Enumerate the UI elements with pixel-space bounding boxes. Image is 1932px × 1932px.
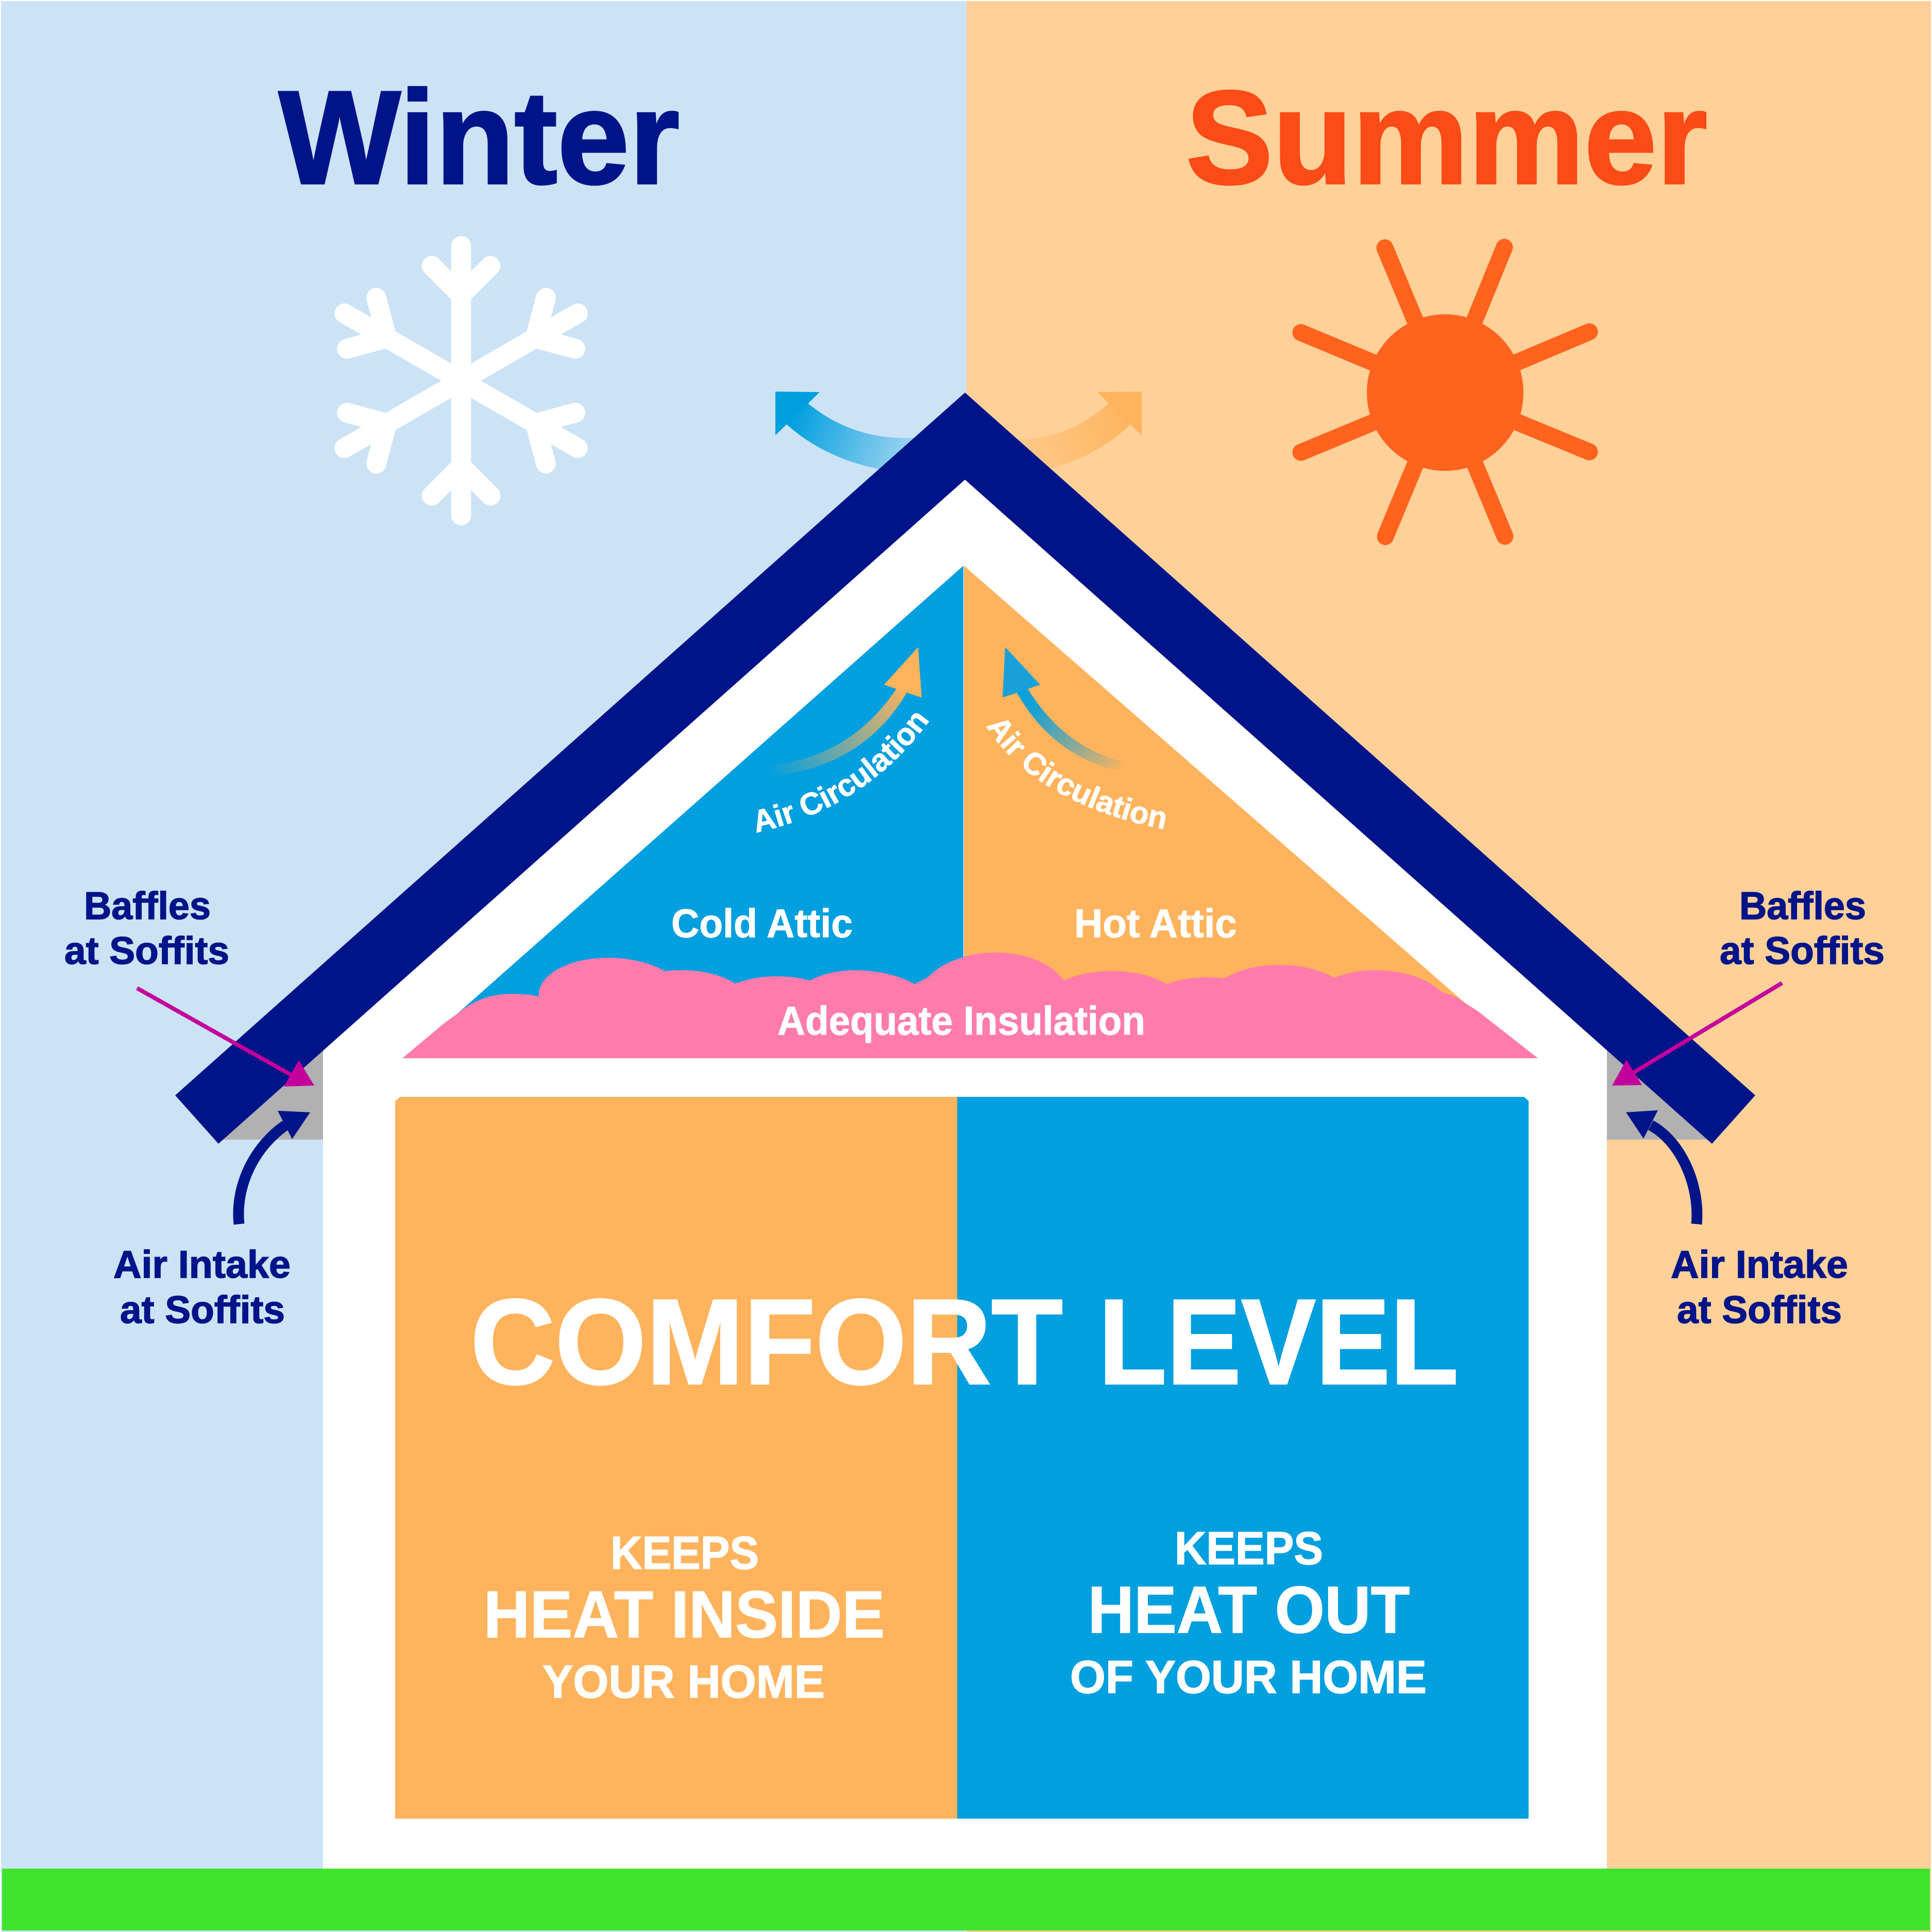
room: winter side bbox=[395, 1097, 957, 1819]
arrow: air intake left bbox=[239, 1111, 310, 1224]
label: Air Intake at Soffits right: Air Intake bbox=[1671, 1243, 1848, 1286]
text block: winter benefit: HEAT INSIDE bbox=[483, 1578, 885, 1652]
text block: summer benefit: HEAT OUT bbox=[1088, 1573, 1410, 1647]
icon: sun bbox=[1301, 247, 1589, 537]
label: Hot Attic: Hot Attic bbox=[1074, 901, 1237, 946]
label: Baffles at Soffits right: at Soffits bbox=[1720, 929, 1885, 972]
background: summer panel bbox=[967, 1, 1931, 1932]
label: air circulation summer: Air Circulation bbox=[986, 720, 1165, 829]
label: Baffles at Soffits right bbox=[1720, 884, 1885, 972]
label: Air Intake at Soffits left: at Soffits bbox=[120, 1288, 285, 1331]
text block: winter benefit: YOUR HOME bbox=[543, 1656, 825, 1708]
label: Air Intake at Soffits left bbox=[113, 1243, 291, 1331]
ground: green strip bbox=[2, 1869, 1930, 1930]
text block: summer benefit bbox=[1070, 1523, 1427, 1703]
arrow: baffles pointer right bbox=[1612, 983, 1782, 1086]
soffit: right gray baffle bbox=[1607, 1050, 1708, 1140]
label: Air Intake at Soffits right bbox=[1671, 1243, 1848, 1331]
text block: summer benefit: OF YOUR HOME bbox=[1070, 1652, 1427, 1703]
arrow: warm air vent blue bbox=[775, 392, 922, 471]
label: Baffles at Soffits left: at Soffits bbox=[64, 929, 229, 972]
label: Adequate Insulation: Adequate Insulation bbox=[777, 998, 1145, 1043]
label: air circulation winter: Air Circulation bbox=[756, 713, 929, 833]
heading: COMFORT LEVEL bbox=[470, 1274, 1459, 1410]
label: Baffles at Soffits left: Baffles bbox=[84, 884, 211, 927]
arrow: attic air circulation winter bbox=[768, 647, 922, 777]
label: Cold Attic: Cold Attic bbox=[671, 901, 853, 946]
label: Air Intake at Soffits left: Air Intake bbox=[113, 1243, 291, 1286]
insulation: pink cloud bbox=[402, 953, 1538, 1058]
roof: navy chevron bbox=[175, 393, 1755, 1144]
attic: hot side bbox=[964, 566, 1479, 1030]
text block: winter benefit: KEEPS bbox=[611, 1528, 759, 1579]
heading: Winter: Winter bbox=[279, 63, 680, 212]
text block: summer benefit: KEEPS bbox=[1175, 1523, 1323, 1574]
label: Air Intake at Soffits right: at Soffits bbox=[1677, 1288, 1842, 1331]
house: white walls bbox=[323, 480, 1607, 1870]
label: Baffles at Soffits left bbox=[64, 884, 229, 972]
text block: winter benefit bbox=[483, 1528, 885, 1708]
arrow: baffles pointer left bbox=[137, 988, 314, 1087]
icon: snowflake bbox=[330, 246, 592, 515]
attic: cold side bbox=[438, 566, 963, 1030]
heading: COMFORT LEVEL: LEVEL bbox=[1098, 1274, 1459, 1410]
label: Baffles at Soffits right: Baffles bbox=[1739, 884, 1866, 927]
arrow: air intake right bbox=[1626, 1110, 1697, 1224]
soffit: left gray baffle bbox=[222, 1050, 323, 1140]
arrow: hot air vent orange bbox=[1010, 392, 1142, 470]
background: winter panel bbox=[1, 1, 967, 1932]
heading: Summer: Summer bbox=[1186, 63, 1707, 212]
arrow: attic air circulation summer bbox=[1003, 647, 1125, 772]
heading: COMFORT LEVEL: COMFORT bbox=[470, 1274, 1063, 1410]
room: summer side bbox=[957, 1097, 1529, 1819]
